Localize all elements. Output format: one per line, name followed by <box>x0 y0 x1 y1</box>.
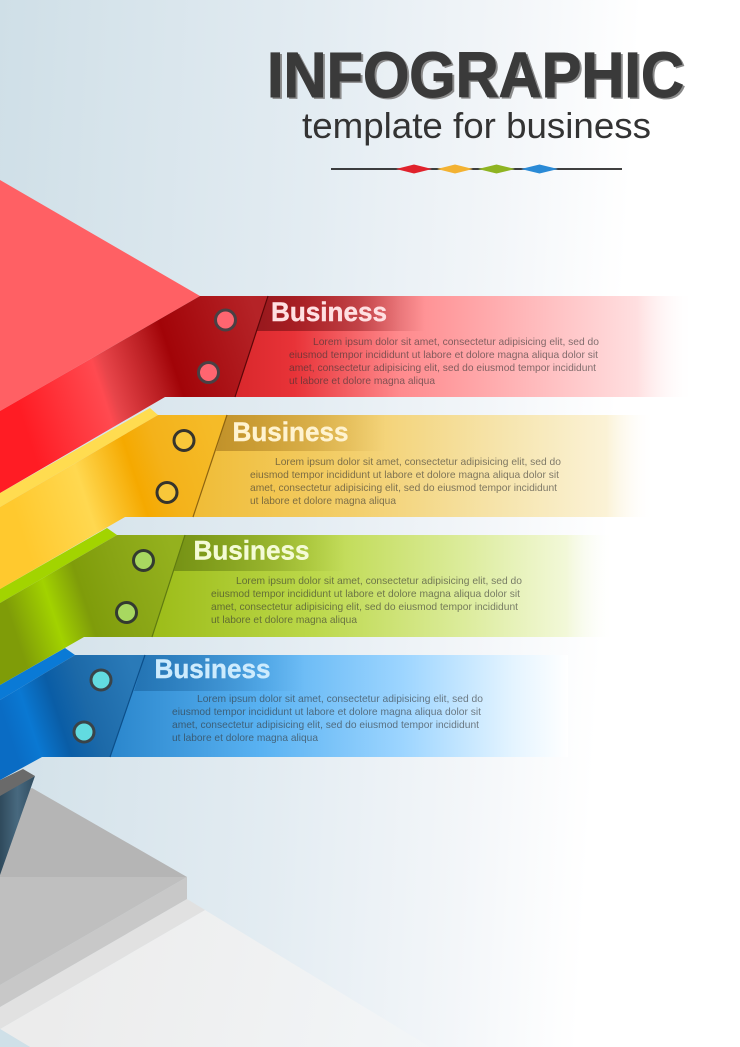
title: INFOGRAPHIC: INFOGRAPHIC <box>269 40 686 112</box>
floor edge <box>0 899 205 1029</box>
layer 1: red <box>0 180 692 493</box>
red body text: Lorem ipsum dolor sit amet, consectetur adipisicing elit, sed do <box>313 337 599 348</box>
yellow body text: eiusmod tempor incididunt ut labore et dolore magna aliqua dolor sit <box>250 470 559 481</box>
dark prism <box>0 776 35 875</box>
blue side and tab <box>0 655 145 780</box>
yellow body text: amet, consectetur adipisicing elit, sed do eiusmod tempor incididunt <box>250 483 557 494</box>
green top strip <box>0 528 117 603</box>
floor plate <box>0 910 430 1047</box>
pedestal top <box>0 788 187 877</box>
red body text: ut labore et dolore magna aliqua <box>289 376 435 387</box>
green heading: Business <box>194 536 310 566</box>
green body text <box>211 576 522 626</box>
red header band <box>257 296 425 331</box>
pedestal side <box>0 877 187 1007</box>
yellow body text: ut labore et dolore magna aliqua <box>250 496 396 507</box>
blue body text: amet, consectetur adipisicing elit, sed do eiusmod tempor incididunt <box>172 720 479 731</box>
layer 3: green <box>0 528 612 685</box>
red ribbon <box>235 296 692 397</box>
green body text: amet, consectetur adipisicing elit, sed do eiusmod tempor incididunt <box>211 602 518 613</box>
layer 4: blue <box>0 648 568 780</box>
blue body text: Lorem ipsum dolor sit amet, consectetur adipisicing elit, sed do <box>197 694 483 705</box>
blue header band <box>134 655 305 691</box>
red body text: eiusmod tempor incididunt ut labore et dolore magna aliqua dolor sit <box>289 350 598 361</box>
blue dots <box>74 670 111 742</box>
green body text: ut labore et dolore magna aliqua <box>211 615 357 626</box>
red body text <box>289 337 599 387</box>
blue body text: eiusmod tempor incididunt ut labore et dolore magna aliqua dolor sit <box>172 707 481 718</box>
green side and tab <box>0 535 185 685</box>
blue ribbon <box>110 655 568 757</box>
green body text: eiusmod tempor incididunt ut labore et dolore magna aliqua dolor sit <box>211 589 520 600</box>
yellow top strip <box>0 408 158 507</box>
blue heading: Business <box>154 654 270 684</box>
divider with coloured diamonds <box>331 164 622 174</box>
red dots <box>198 310 236 382</box>
green body text: Lorem ipsum dolor sit amet, consectetur adipisicing elit, sed do <box>236 576 522 587</box>
yellow heading: Business <box>232 417 348 447</box>
yellow body text <box>250 457 561 507</box>
yellow header band <box>216 415 385 451</box>
green ribbon <box>152 535 612 637</box>
blue body text: ut labore et dolore magna aliqua <box>172 733 318 744</box>
yellow body text: Lorem ipsum dolor sit amet, consectetur adipisicing elit, sed do <box>275 457 561 468</box>
subtitle: template for business <box>302 105 651 146</box>
blue top strip <box>0 648 75 700</box>
title: INFOGRAPHIC: INFOGRAPHIC <box>267 39 684 111</box>
red side and tab <box>0 296 268 493</box>
title block <box>267 39 686 174</box>
layer 2: yellow <box>0 408 652 589</box>
red heading: Business <box>271 297 387 327</box>
yellow side and tab <box>0 415 227 589</box>
yellow dots <box>157 430 194 502</box>
base: grey pedestal and floor <box>0 769 430 1047</box>
blue body text <box>172 694 483 744</box>
yellow ribbon <box>193 415 652 517</box>
red top face <box>0 180 200 411</box>
red body text: amet, consectetur adipisicing elit, sed do eiusmod tempor incididunt <box>289 363 596 374</box>
green header band <box>174 535 345 571</box>
green dots <box>116 550 154 622</box>
